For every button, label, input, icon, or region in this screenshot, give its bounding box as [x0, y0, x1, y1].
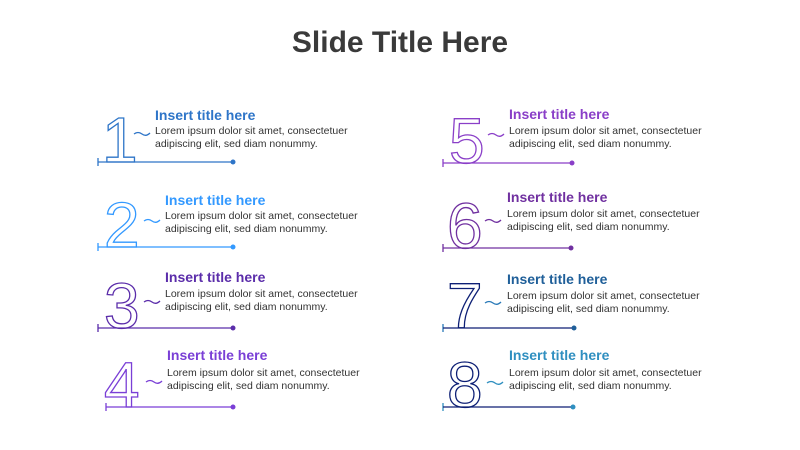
item 1: adipiscing elit, sed diam nonummy.: [155, 138, 318, 150]
item 7: [443, 270, 700, 342]
item 8: 8: [447, 349, 483, 421]
item 7: 7: [447, 270, 483, 342]
item 1: Lorem ipsum dolor sit amet, consectetuer: [155, 125, 348, 137]
item 2: adipiscing elit, sed diam nonummy.: [165, 223, 328, 235]
title: Slide Title Here: [292, 26, 508, 59]
item 4: adipiscing elit, sed diam nonummy.: [167, 380, 330, 392]
item 2: Insert title here: [165, 192, 266, 208]
item 8: Lorem ipsum dolor sit amet, consectetuer: [509, 367, 702, 379]
item 3: Insert title here: [165, 269, 266, 285]
item 2: Lorem ipsum dolor sit amet, consectetuer: [165, 210, 358, 222]
item 6: [443, 189, 700, 262]
item 6: adipiscing elit, sed diam nonummy.: [507, 221, 670, 233]
item 4: [104, 347, 360, 421]
item 1: [98, 104, 348, 176]
item 2: [98, 189, 358, 261]
item 7: Lorem ipsum dolor sit amet, consectetuer: [507, 290, 700, 302]
item 2: 2: [104, 189, 140, 261]
item 4: Lorem ipsum dolor sit amet, consectetuer: [167, 367, 360, 379]
item 4: 4: [104, 349, 140, 421]
item 7: adipiscing elit, sed diam nonummy.: [507, 303, 670, 315]
item 8: [443, 347, 702, 421]
item 5: [443, 105, 702, 177]
item 4: Insert title here: [167, 347, 268, 363]
item 6: Insert title here: [507, 189, 608, 205]
item 8: adipiscing elit, sed diam nonummy.: [509, 380, 672, 392]
item 3: Lorem ipsum dolor sit amet, consectetuer: [165, 288, 358, 300]
item 5: Lorem ipsum dolor sit amet, consectetuer: [509, 125, 702, 137]
item 5: Insert title here: [509, 106, 610, 122]
item 5: 5: [449, 105, 485, 177]
item 6: 6: [447, 190, 483, 262]
item 3: adipiscing elit, sed diam nonummy.: [165, 301, 328, 313]
item 6: Lorem ipsum dolor sit amet, consectetuer: [507, 208, 700, 220]
item 1: 1: [102, 104, 138, 176]
item 3: 3: [104, 270, 140, 342]
item 3: [98, 269, 358, 342]
item 1: Insert title here: [155, 107, 256, 123]
item 5: adipiscing elit, sed diam nonummy.: [509, 138, 672, 150]
item 8: Insert title here: [509, 347, 610, 363]
item 7: Insert title here: [507, 271, 608, 287]
